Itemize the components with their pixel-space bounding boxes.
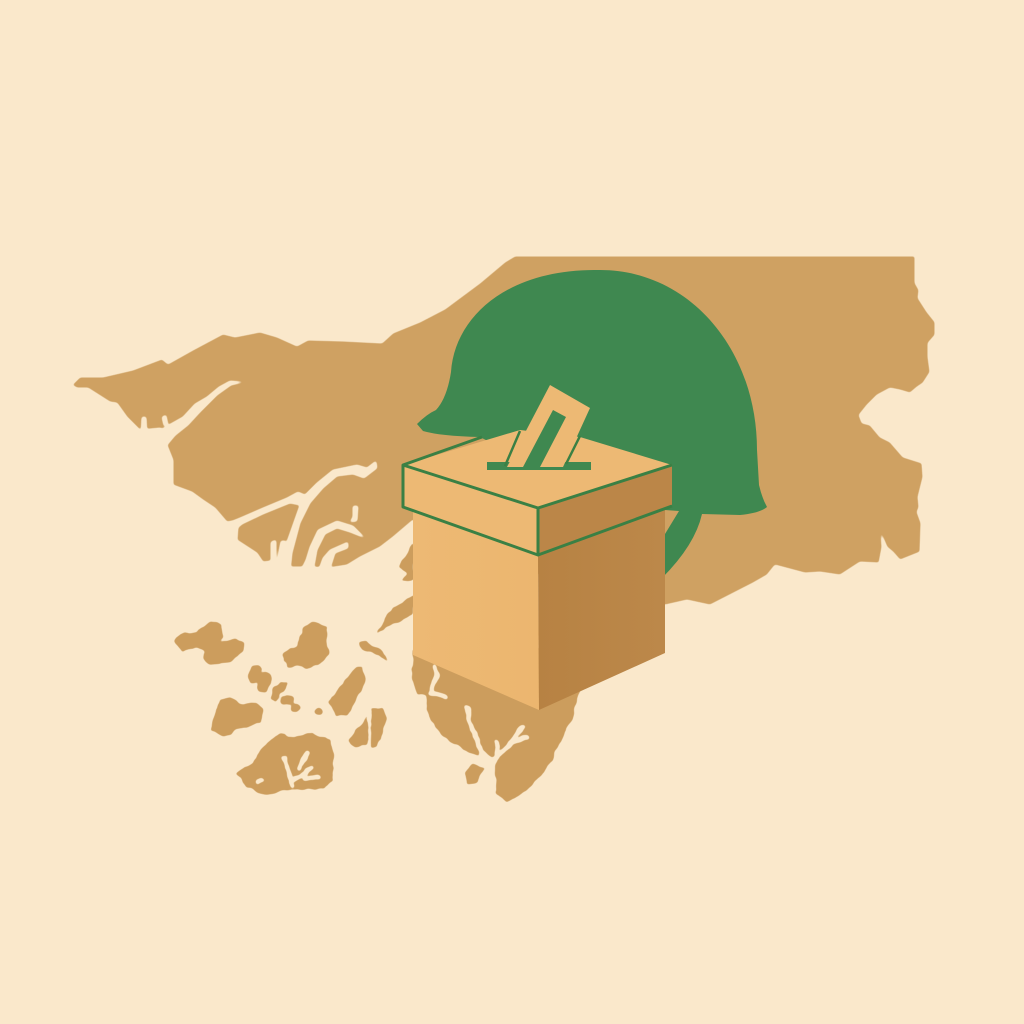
map: southern coast and offshore islands xyxy=(160,530,610,815)
box: lid front xyxy=(403,465,538,555)
island: thin strand xyxy=(359,641,388,661)
islet three xyxy=(271,681,287,702)
box: side face xyxy=(538,505,665,710)
creeks in large island xyxy=(257,754,318,786)
south creek two xyxy=(467,707,522,762)
map: coastal notch two xyxy=(162,415,168,426)
map: upper estuary xyxy=(160,381,244,437)
ballot paper xyxy=(505,385,590,467)
map: coastal notch one xyxy=(141,417,147,434)
islet two xyxy=(255,671,273,693)
south creek one xyxy=(430,667,446,697)
helmet strap gap xyxy=(665,510,679,534)
box: slot bar xyxy=(487,462,591,470)
helmet xyxy=(417,270,767,578)
map: creek at peninsula two xyxy=(277,541,286,562)
box: lid top xyxy=(403,430,672,508)
islet one xyxy=(246,663,264,685)
island: small south xyxy=(465,765,485,783)
map: small estuary xyxy=(318,542,348,572)
island: near box upper xyxy=(377,597,413,633)
island: northern block xyxy=(282,622,328,668)
south wedge xyxy=(478,752,500,792)
island: butterfly shaped xyxy=(175,622,244,664)
islet six xyxy=(315,708,323,716)
map: mainland xyxy=(56,240,956,620)
islet five xyxy=(290,704,300,712)
southern mainland xyxy=(412,640,600,802)
island: twin east xyxy=(370,708,386,747)
map: creek at peninsula xyxy=(271,540,276,562)
island: elongated xyxy=(329,667,365,715)
map: central estuary xyxy=(230,461,377,572)
islet four xyxy=(280,694,294,706)
box: lid side xyxy=(538,465,672,555)
ballot box xyxy=(403,385,672,710)
island: large southern xyxy=(236,733,334,794)
south creek branches xyxy=(497,737,527,758)
island: western xyxy=(211,697,263,737)
ballot: inner window xyxy=(523,410,566,467)
box: lid outlines xyxy=(403,437,672,555)
box: front face xyxy=(413,512,539,710)
map: southern estuary xyxy=(300,521,365,572)
map: inland creek xyxy=(350,506,358,522)
island: near box lower xyxy=(399,543,413,582)
island: twin west xyxy=(349,717,368,748)
